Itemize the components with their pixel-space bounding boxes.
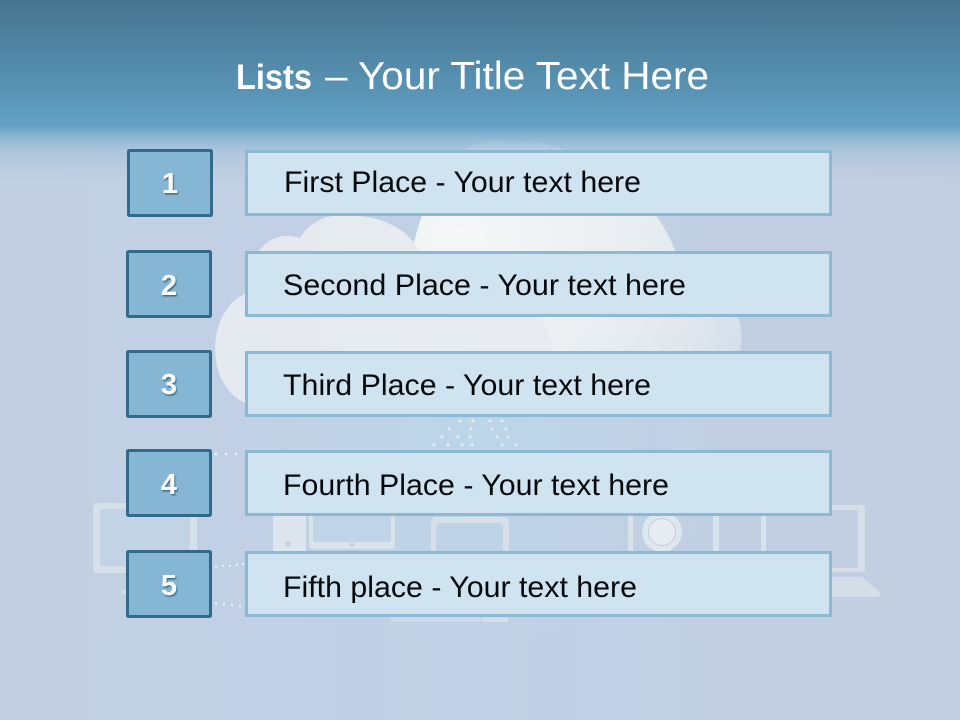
icon: center screen [390, 517, 509, 622]
icon: camera and bars [628, 512, 766, 552]
illustration: device icons [93, 503, 880, 622]
number box 4: 4 [161, 469, 177, 501]
number box 4 [128, 450, 210, 516]
title: Lists [236, 58, 312, 97]
illustration: dotted data stream [432, 420, 518, 446]
text bar 2 [246, 252, 830, 316]
text bar 5 [246, 552, 830, 616]
text bar 1 [246, 152, 830, 214]
icon: phone [273, 516, 306, 552]
text bar 3 [246, 352, 830, 416]
text bar 3: Third Place - Your text here [283, 369, 651, 402]
illustration: dotted connectors [214, 452, 244, 607]
number box 1 [128, 150, 212, 216]
icon: left monitor [93, 503, 197, 594]
text bar 1: First Place - Your text here [284, 166, 641, 199]
text bar 5: Fifth place - Your text here [283, 571, 637, 604]
list item 1 [128, 150, 830, 216]
icon: right laptop [832, 505, 880, 597]
number box 2 [128, 252, 210, 316]
list item 3 [128, 352, 830, 416]
text bar 2: Second Place - Your text here [283, 269, 686, 302]
list item 2 [128, 252, 830, 316]
number box 3: 3 [161, 369, 177, 401]
title: – Your Title Text Here [325, 55, 709, 98]
text bar 4 [246, 452, 830, 514]
number box 2: 2 [161, 270, 177, 302]
number box 5 [128, 552, 210, 616]
illustration: cloud [215, 140, 741, 417]
list item 5 [128, 552, 830, 616]
number box 1: 1 [162, 168, 178, 200]
icon: tablet [309, 516, 395, 549]
list item 4 [128, 450, 830, 516]
text bar 4: Fourth Place - Your text here [283, 469, 669, 502]
header band [0, 0, 960, 190]
number box 5: 5 [161, 570, 177, 602]
number box 3 [128, 352, 210, 416]
